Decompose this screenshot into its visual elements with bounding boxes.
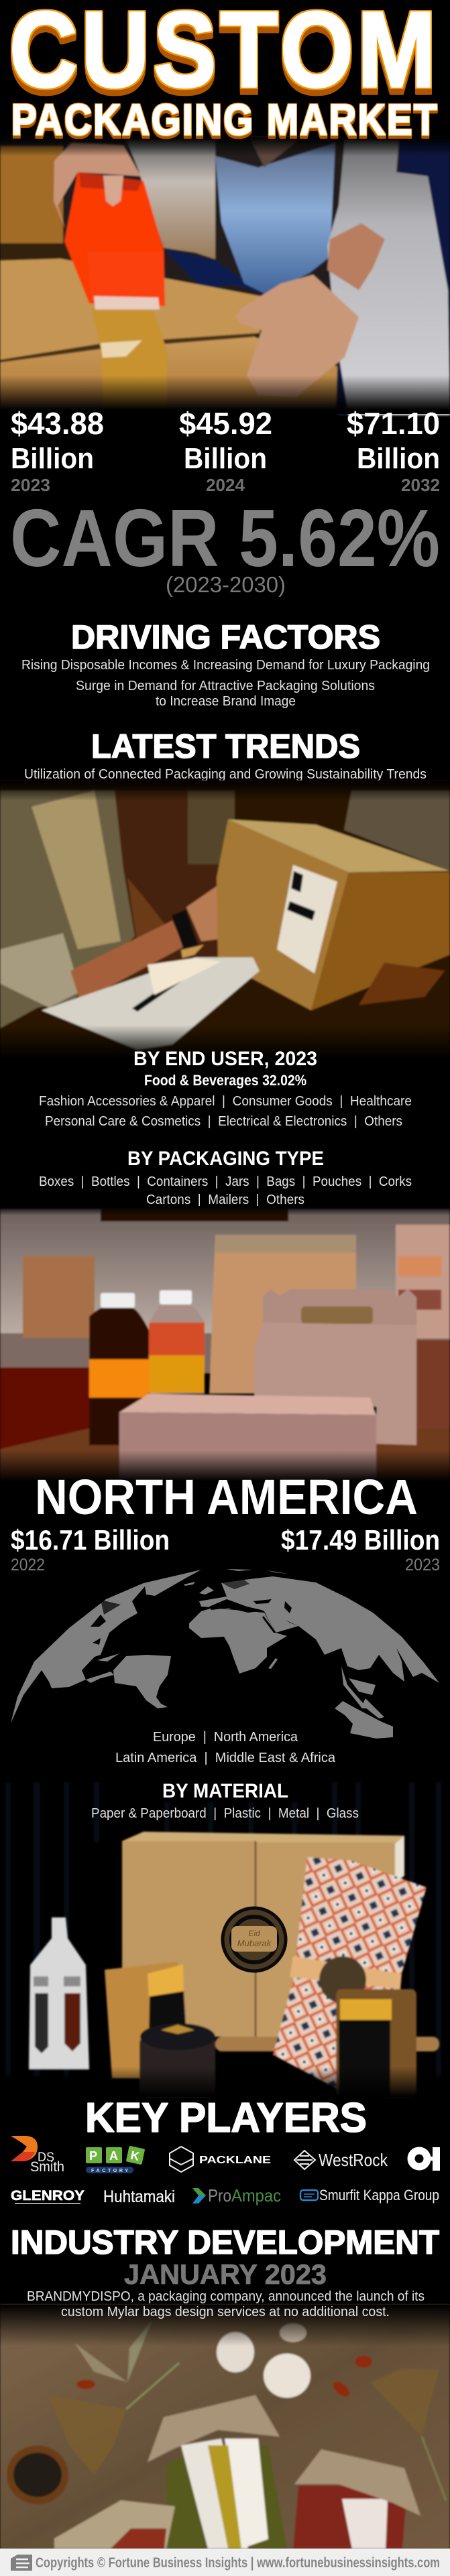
logo: ProAmpac: Pro (208, 2185, 231, 2206)
section: industry development: INDUSTRY DEVELOPMENT (11, 2224, 439, 2261)
stat: 2024 market value: 2024 (206, 475, 245, 495)
section: driving factors (21, 618, 430, 709)
section: by material (91, 1780, 359, 1821)
photo: gift box with lantern and fabric (0, 1782, 450, 2097)
photo: bottles, bag and boxes on counter (0, 1206, 450, 1487)
section: industry development: BRANDMYDISPO, a packaging company, announced the launch of its (27, 2289, 425, 2304)
section: latest trends: Utilization of Connected Packaging and Growing Sustainability Trends (24, 767, 427, 782)
logo: DS Smith: DS (38, 2151, 54, 2165)
logo: Huhtamaki: Huhtamaki (103, 2187, 175, 2206)
section: by end user: Personal Care & Cosmetics | Electrical & Electronics | Others (45, 1114, 402, 1129)
region heading: north america: 2022 (11, 1556, 45, 1574)
section: industry development (11, 2224, 439, 2319)
section: industry development: custom Mylar bags design services at no additional cost. (61, 2305, 390, 2319)
stat: 2023 market value: Billion (11, 442, 94, 475)
logo: Packlane (170, 2147, 271, 2172)
stat: 2023 market value (11, 406, 104, 495)
logo: PAK Factory: FACTORY (91, 2169, 128, 2173)
section: latest trends: LATEST TRENDS (91, 728, 360, 765)
logo: O-I (411, 2147, 440, 2171)
region heading: north america: $16.71 Billion (11, 1524, 170, 1556)
stat: CAGR: (2023-2030) (166, 572, 286, 597)
region list (115, 1730, 336, 1765)
photo: hand taping cardboard box (0, 137, 450, 415)
ornament: Eid Mubarak tag: Mubarak (237, 1938, 272, 1948)
heading: key players: KEY PLAYERS (85, 2095, 367, 2141)
section: by end user: BY END USER, 2023 (133, 1048, 317, 1070)
section: driving factors: Rising Disposable Incomes & Increasing Demand for Luxury Packaging (21, 658, 430, 673)
section: by packaging type: Boxes | Bottles | Containers | Jars | Bags | Pouches | Corks (39, 1174, 412, 1189)
stat: 2023 market value: $43.88 (11, 406, 104, 441)
stat: 2032 market value: $71.10 (347, 406, 440, 441)
stat: 2032 market value: 2032 (401, 475, 440, 495)
ornament: Eid Mubarak tag (223, 1908, 286, 1971)
logo: DS Smith (11, 2136, 64, 2175)
region heading: north america: NORTH AMERICA (35, 1469, 418, 1525)
logo: PAK Factory (86, 2146, 145, 2173)
stat: 2032 market value: Billion (357, 442, 440, 475)
section: driving factors: Surge in Demand for Attractive Packaging Solutions (76, 679, 375, 693)
ornament: Eid Mubarak tag: Eid (248, 1929, 260, 1938)
logo: Packlane: PACKLANE (199, 2155, 271, 2166)
stat: 2024 market value (179, 406, 272, 495)
section: by end user (39, 1048, 412, 1129)
section: by material: BY MATERIAL (162, 1780, 288, 1802)
photo: pickle jars on wooden table (0, 2305, 450, 2549)
stat: 2023 market value: 2023 (11, 475, 50, 495)
logo: ProAmpac: Ampac (231, 2185, 281, 2206)
logo: DS Smith: Smith (30, 2159, 64, 2175)
region heading: north america: 2023 (405, 1556, 440, 1574)
logo: WestRock (294, 2150, 388, 2170)
logo: PAK Factory: P (89, 2149, 97, 2163)
logo: ProAmpac (192, 2185, 281, 2206)
logo: Glenroy: GLENROY (11, 2188, 85, 2204)
section: by packaging type (39, 1148, 412, 1207)
section: by end user: Food & Beverages 32.02% (144, 1072, 306, 1089)
logo: PAK Factory: A (109, 2149, 118, 2163)
photo: courier and box with clipboard (0, 781, 450, 1065)
region heading: north america (11, 1469, 440, 1574)
icon: fortune business insights logo (11, 2555, 32, 2571)
section: by end user: Fashion Accessories & Apparel | Consumer Goods | Healthcare (39, 1094, 412, 1109)
section: by material: Paper & Paperboard | Plastic | Metal | Glass (91, 1806, 359, 1821)
region list: Europe | North America (153, 1730, 298, 1745)
stat: 2032 market value (347, 406, 440, 495)
logo: WestRock: WestRock (319, 2150, 388, 2170)
footer bar (0, 2549, 450, 2576)
section: industry development: JANUARY 2023 (124, 2258, 327, 2290)
stat: 2024 market value: Billion (184, 442, 267, 475)
region list: Latin America | Middle East & Africa (115, 1751, 336, 1765)
section: latest trends (24, 728, 427, 782)
section: driving factors: DRIVING FACTORS (71, 618, 380, 656)
stat: 2024 market value: $45.92 (179, 406, 272, 441)
logo: PAK Factory: K (129, 2149, 141, 2163)
section: driving factors: to Increase Brand Image (156, 694, 296, 709)
section: by packaging type: Cartons | Mailers | Others (146, 1193, 304, 1207)
section: by packaging type: BY PACKAGING TYPE (127, 1148, 324, 1170)
globe map (11, 1569, 439, 1739)
